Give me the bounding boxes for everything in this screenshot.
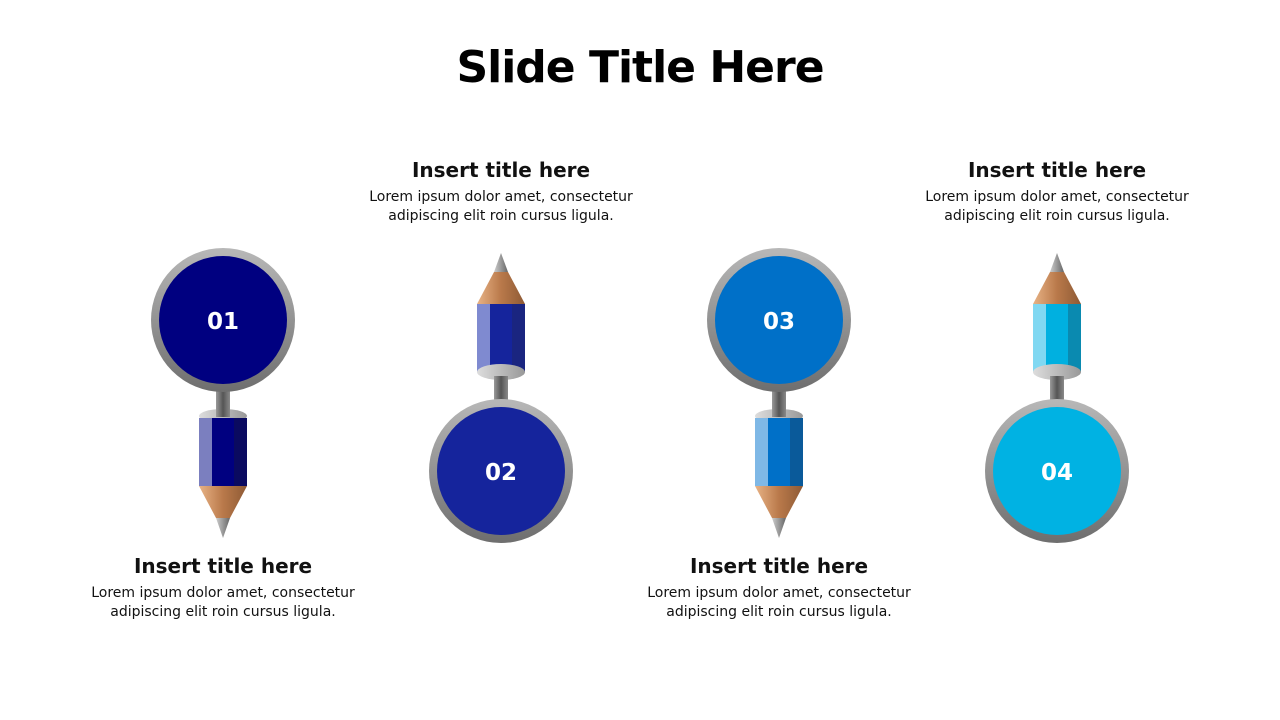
text block 04: adipiscing elit roin cursus ligula. [944,208,1170,224]
item 02: magnifier pencil [429,253,573,543]
text block 03: Insert title here [690,554,868,578]
circle 04 [993,407,1121,535]
text block 04 [925,158,1189,224]
item 03: magnifier pencil: 03 [763,309,795,335]
text block 03: Lorem ipsum dolor amet, consectetur [647,585,911,601]
text block 02: Lorem ipsum dolor amet, consectetur [369,189,633,205]
text block 02 [369,158,633,224]
title: Slide Title Here [456,42,824,93]
item 04: magnifier pencil [985,253,1129,543]
text block 01: Insert title here [134,554,312,578]
circle 02 [437,407,565,535]
item 04: magnifier pencil: 04 [1041,460,1073,486]
item 01: magnifier pencil: 01 [207,309,239,335]
text block 03 [647,554,911,620]
text block 02: Insert title here [412,158,590,182]
circle 01 [159,256,287,384]
text block 01 [91,554,355,620]
text block 01: adipiscing elit roin cursus ligula. [110,604,336,620]
text block 02: adipiscing elit roin cursus ligula. [388,208,614,224]
item 02: magnifier pencil: 02 [485,460,517,486]
text block 04: Insert title here [968,158,1146,182]
text block 03: adipiscing elit roin cursus ligula. [666,604,892,620]
text block 04: Lorem ipsum dolor amet, consectetur [925,189,1189,205]
circle 03 [715,256,843,384]
item 01: magnifier pencil [151,248,295,538]
text block 01: Lorem ipsum dolor amet, consectetur [91,585,355,601]
item 03: magnifier pencil [707,248,851,538]
